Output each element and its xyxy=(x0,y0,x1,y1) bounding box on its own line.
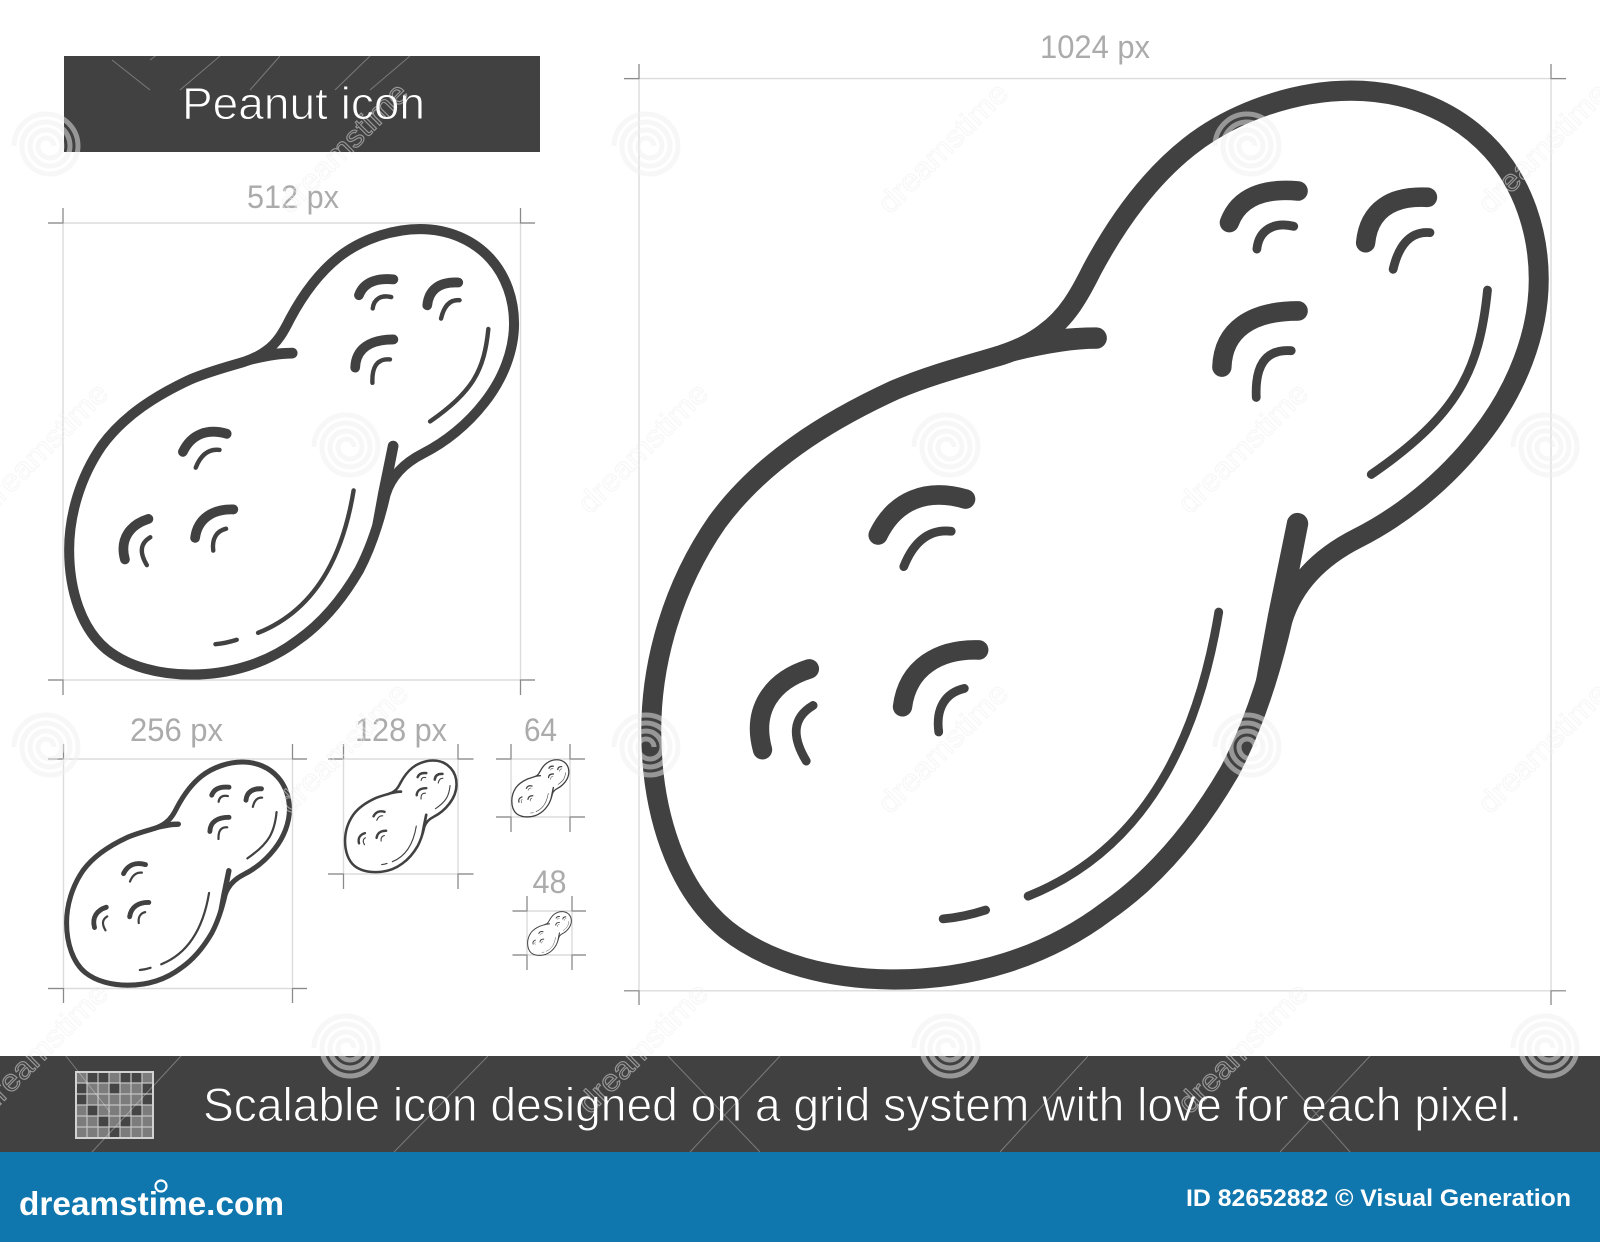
banner text: Scalable icon designed on a grid system with love for each pixel. xyxy=(203,1078,1522,1131)
text: dreamstime xyxy=(572,377,715,520)
text: dreamstime xyxy=(872,677,1015,820)
size label: 1024 px: 1024 px xyxy=(1040,29,1150,65)
title bar xyxy=(64,56,540,152)
panel: 1024 px peanut icon xyxy=(624,64,1566,1005)
text: dreamstime xyxy=(1172,977,1315,1120)
image id and credit: ID 82652882 © Visual Generation xyxy=(1186,1185,1571,1212)
size label: 48: 48 xyxy=(532,864,566,900)
size label: 512 px: 512 px xyxy=(247,179,339,215)
size label: 64: 64 xyxy=(524,712,557,748)
text: dreamstime xyxy=(872,77,1015,220)
panel: 48 px peanut icon xyxy=(512,896,586,970)
text: dreamstime xyxy=(572,977,715,1120)
size label: 128 px: 128 px xyxy=(355,712,447,748)
grid system banner xyxy=(0,1056,1600,1152)
text: dreamstime xyxy=(272,677,415,820)
text: dreamstime xyxy=(272,77,415,220)
text: dreamstime xyxy=(1172,377,1315,520)
size label: 256 px: 256 px xyxy=(130,712,223,748)
panel: 256 px peanut icon xyxy=(48,744,307,1003)
panel: 64 px peanut icon xyxy=(496,744,585,832)
title text: Peanut icon xyxy=(182,78,425,129)
footer bar xyxy=(0,1152,1600,1242)
panel: 128 px peanut icon xyxy=(328,744,474,889)
icon: pixel grid xyxy=(76,1072,153,1138)
logo: dreamstime.com: dreamstime.com xyxy=(19,1185,284,1222)
panel: 512 px peanut icon xyxy=(48,208,535,695)
